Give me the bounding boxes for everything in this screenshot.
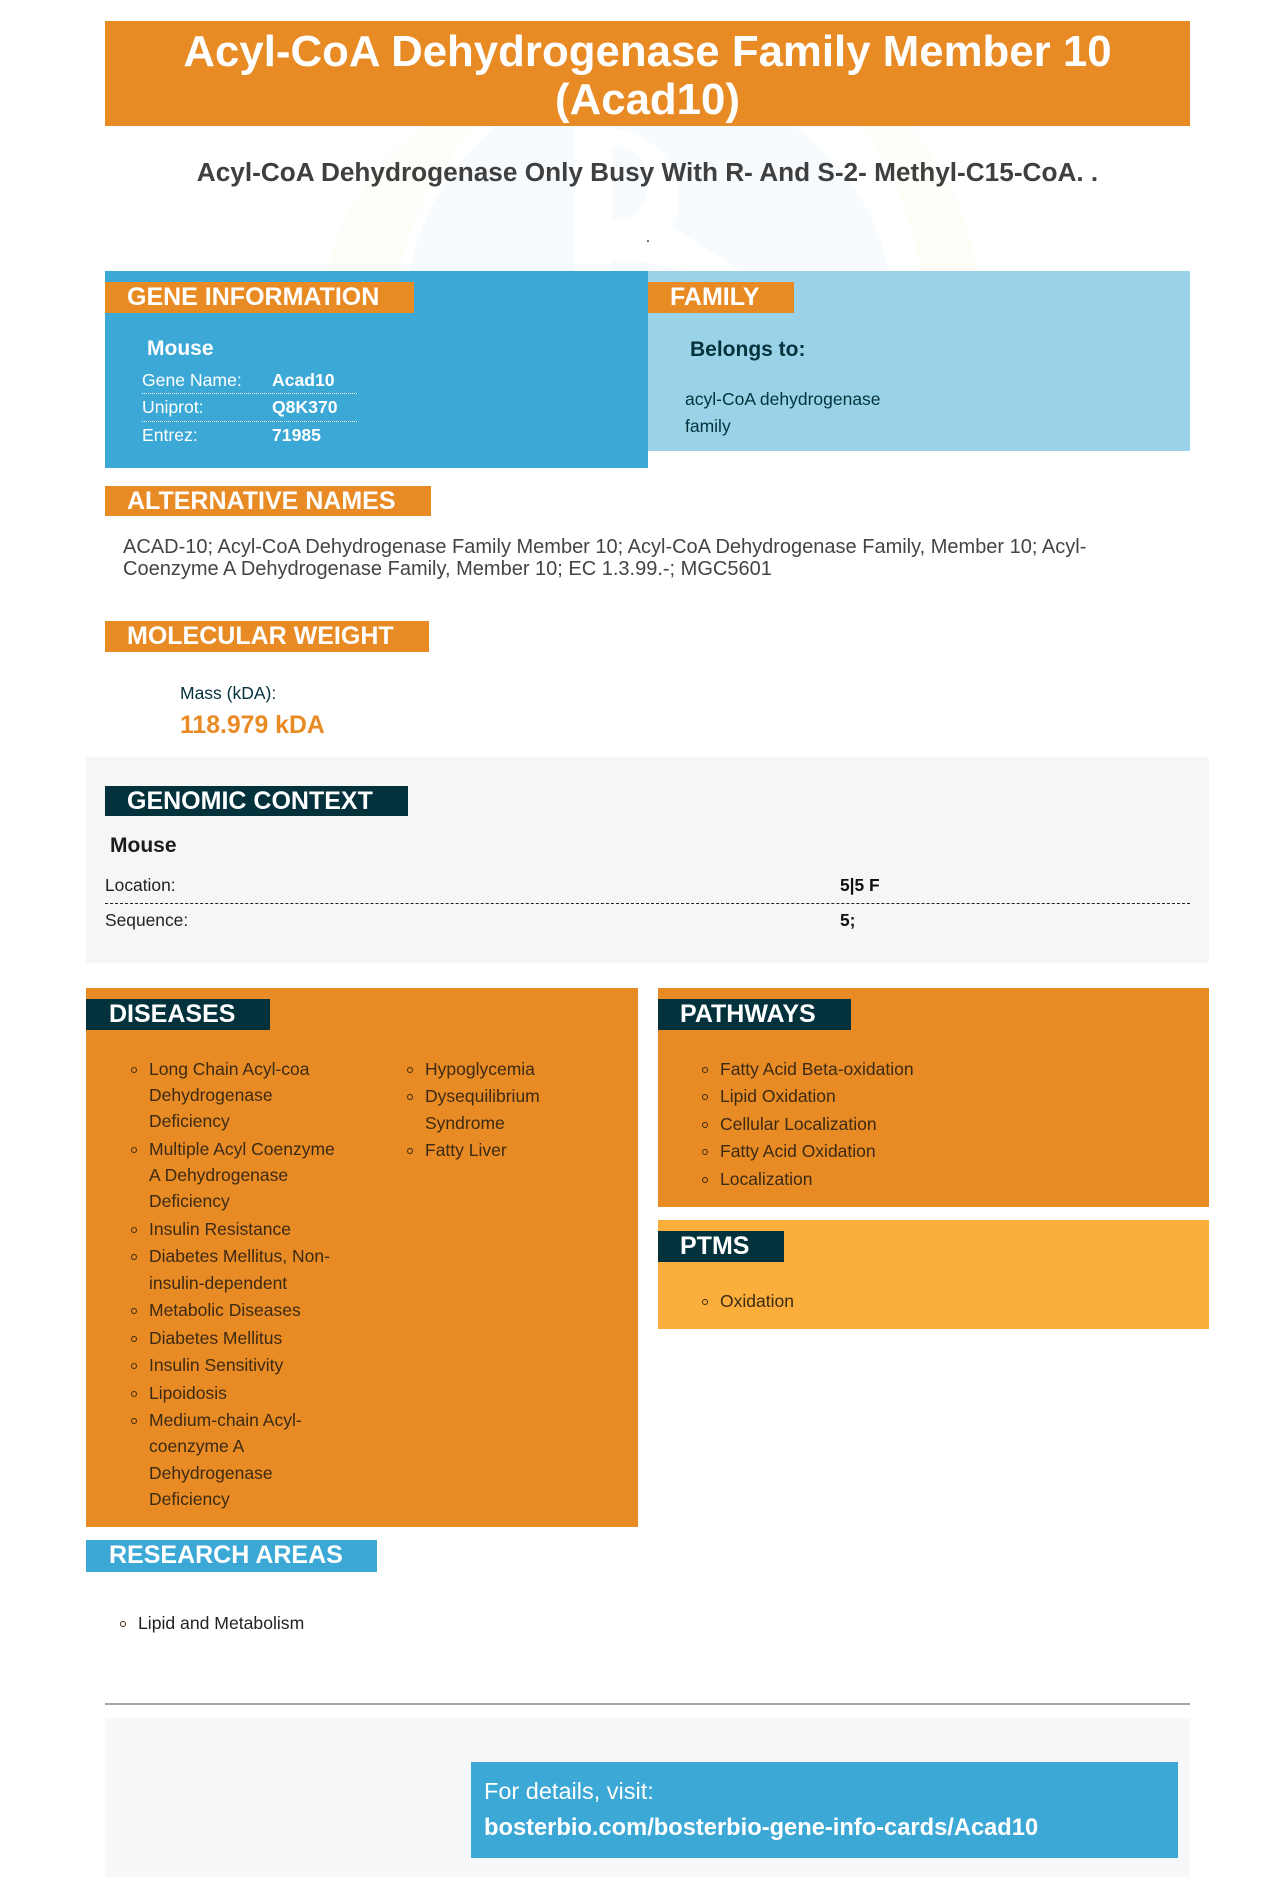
- sequence value: 5;: [840, 910, 855, 930]
- entrez row: [142, 425, 321, 445]
- panel: pathways: [658, 988, 1209, 1207]
- family text: acyl-CoA dehydrogenase: [685, 389, 881, 409]
- panel: ptms: [658, 1220, 1209, 1329]
- diseases list column 1: coenzyme A: [149, 1436, 244, 1456]
- subtitle: Acyl-CoA Dehydrogenase Only Busy With R- And S-2- Methyl-C15-CoA. .: [197, 157, 1098, 187]
- species label: Mouse: [110, 834, 177, 857]
- entrez row: 71985: [272, 425, 321, 445]
- mass value: 118.979 kDA: [180, 712, 325, 739]
- diseases list column 1: Dehydrogenase: [149, 1085, 273, 1105]
- heading: diseases: DISEASES: [109, 1000, 235, 1028]
- pathways list: Cellular Localization: [720, 1114, 877, 1134]
- panel: genomic context: [86, 757, 1209, 963]
- alternative names text: ACAD-10; Acyl-CoA Dehydrogenase Family Member 10; Acyl-CoA Dehydrogenase Family, Member 10; Acyl-: [123, 536, 1086, 558]
- belongs to label: Belongs to:: [690, 338, 806, 361]
- panel: gene information: [105, 271, 648, 468]
- family text: [685, 389, 881, 436]
- gene name row: Gene Name:: [142, 370, 242, 390]
- gene name row: Acad10: [272, 370, 335, 390]
- diseases list column 1: Insulin Sensitivity: [149, 1355, 283, 1375]
- sequence row: Sequence:: [105, 910, 188, 930]
- diseases list column 1: A Dehydrogenase: [149, 1165, 288, 1185]
- callout: details link: [471, 1762, 1178, 1858]
- diseases list column 2: Dysequilibrium: [425, 1086, 540, 1106]
- diseases list column 1: Medium-chain Acyl-: [149, 1410, 302, 1430]
- uniprot row: Q8K370: [272, 397, 338, 417]
- panel: family: [648, 271, 1190, 451]
- gene name row: [142, 366, 357, 394]
- title banner: Acyl-CoA Dehydrogenase Family Member 10: [183, 27, 1112, 76]
- heading: research areas: RESEARCH AREAS: [109, 1541, 343, 1569]
- diseases list column 1: Dehydrogenase: [149, 1463, 273, 1483]
- diseases list column 2: Hypoglycemia: [425, 1059, 535, 1079]
- alternative names text: [123, 536, 1086, 580]
- ptms list: Oxidation: [720, 1291, 794, 1311]
- diseases list column 1: Deficiency: [149, 1489, 230, 1509]
- diseases list column 1: Metabolic Diseases: [149, 1300, 301, 1320]
- pathways list: Lipid Oxidation: [720, 1086, 836, 1106]
- entrez row: Entrez:: [142, 425, 198, 445]
- title banner: (Acad10): [555, 75, 740, 124]
- diseases list column 1: Deficiency: [149, 1111, 230, 1131]
- diseases list column 2: Syndrome: [425, 1113, 505, 1133]
- heading: diseases: [86, 999, 270, 1030]
- center dot: .: [646, 229, 650, 246]
- diseases list column 1: Diabetes Mellitus, Non-: [149, 1246, 330, 1266]
- diseases list column 1: Deficiency: [149, 1191, 230, 1211]
- callout url: bosterbio.com/bosterbio-gene-info-cards/Acad10: [484, 1815, 1038, 1841]
- diseases list column 1: [131, 1059, 335, 1509]
- family text: family: [685, 416, 731, 436]
- location row: Location:: [105, 875, 176, 895]
- pathways list: Localization: [720, 1169, 812, 1189]
- heading: ptms: [658, 1231, 784, 1262]
- heading: alternative names: ALTERNATIVE NAMES: [127, 487, 396, 515]
- alternative names text: Coenzyme A Dehydrogenase Family, Member 10; EC 1.3.99.-; MGC5601: [123, 558, 772, 580]
- heading: pathways: PATHWAYS: [680, 1000, 816, 1028]
- heading: family: [648, 282, 794, 313]
- watermark logo: [300, 126, 1000, 271]
- panel: diseases: [86, 988, 638, 1527]
- diseases list column 1: insulin-dependent: [149, 1273, 287, 1293]
- uniprot row: [142, 394, 357, 422]
- diseases list column 1: Lipoidosis: [149, 1383, 227, 1403]
- row divider: [105, 903, 1190, 904]
- diseases list column 2: [407, 1059, 540, 1160]
- species label: Mouse: [147, 337, 214, 360]
- research areas list: Lipid and Metabolism: [138, 1613, 304, 1633]
- title banner: [105, 21, 1190, 126]
- pathways list: Fatty Acid Oxidation: [720, 1141, 876, 1161]
- diseases list column 1: Diabetes Mellitus: [149, 1328, 282, 1348]
- pathways list: Fatty Acid Beta-oxidation: [720, 1059, 914, 1079]
- heading: ptms: PTMS: [680, 1232, 749, 1260]
- pathways list: [702, 1059, 914, 1189]
- diseases list column 1: Multiple Acyl Coenzyme: [149, 1139, 335, 1159]
- heading: genomic context: GENOMIC CONTEXT: [127, 787, 373, 815]
- mass label: Mass (kDA):: [180, 683, 276, 703]
- callout label: For details, visit:: [484, 1778, 654, 1804]
- diseases list column 1: Insulin Resistance: [149, 1219, 291, 1239]
- location value: 5|5 F: [840, 875, 880, 895]
- heading: gene information: GENE INFORMATION: [127, 283, 379, 311]
- heading: molecular weight: MOLECULAR WEIGHT: [127, 622, 394, 650]
- diseases list column 2: Fatty Liver: [425, 1140, 507, 1160]
- heading: family: FAMILY: [670, 283, 759, 311]
- heading: pathways: [658, 999, 851, 1030]
- footer rule: [105, 1703, 1190, 1705]
- diseases list column 1: Long Chain Acyl-coa: [149, 1059, 310, 1079]
- uniprot row: Uniprot:: [142, 397, 204, 417]
- panel: footer: [105, 1718, 1190, 1877]
